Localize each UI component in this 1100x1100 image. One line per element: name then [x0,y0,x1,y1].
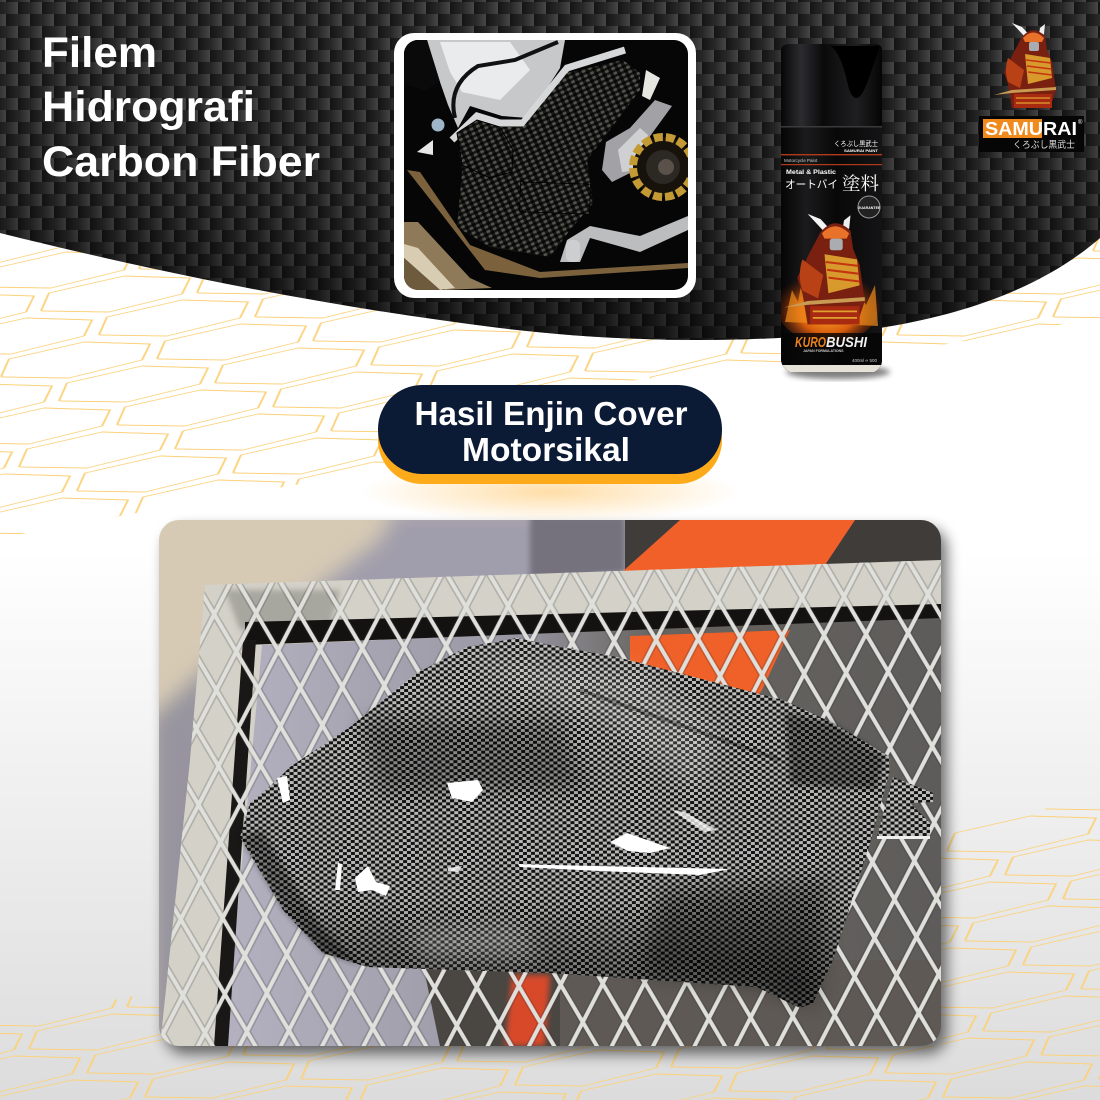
hexagon pattern [0,225,1100,1100]
subtitle pill: Motorsikal [462,431,630,468]
logo plate: SAMURAI [985,119,1077,139]
can label text: GUARANTEE [858,206,881,210]
subtitle pill [360,385,740,522]
can brand: KURO [795,334,826,351]
can cap [781,44,882,127]
logo plate [979,116,1084,152]
carbon fibre cover [240,638,933,1008]
can label text: くろぶし黒武士 [834,139,878,148]
subtitle pill: Hasil Enjin Cover [414,395,688,432]
title: Filem [42,29,157,77]
photo: carbon fibre engine cover [394,33,696,298]
can label text: Motorcycle Paint [784,158,818,163]
can label text [784,139,881,218]
can label text: オートバイ [785,178,838,191]
can brand: 400ml ℮ 500 [852,358,877,363]
logo plate: くろぶし黒武士 [1013,139,1075,151]
logo: samurai [979,23,1084,152]
can samurai [784,214,865,324]
glare highlights [277,776,730,896]
logo figure [994,23,1056,108]
title [42,29,320,186]
wire frame [159,560,941,1050]
spray can [776,44,890,379]
can brand: BUSHI [826,334,868,351]
title: Hidrografi [42,83,255,131]
can label text: SAMURAI PAINT [844,149,879,153]
logo plate: ® [1078,119,1083,126]
can label text: Metal & Plastic [786,170,837,176]
photo: motorcycle engine cover result [150,510,947,1060]
can brand: JAPAN FORMULATIONS [803,349,844,353]
title: Carbon Fiber [42,138,320,186]
can brand [795,334,877,363]
can label text: 塗料 [842,170,879,196]
header: carbon fibre band [0,0,1100,340]
